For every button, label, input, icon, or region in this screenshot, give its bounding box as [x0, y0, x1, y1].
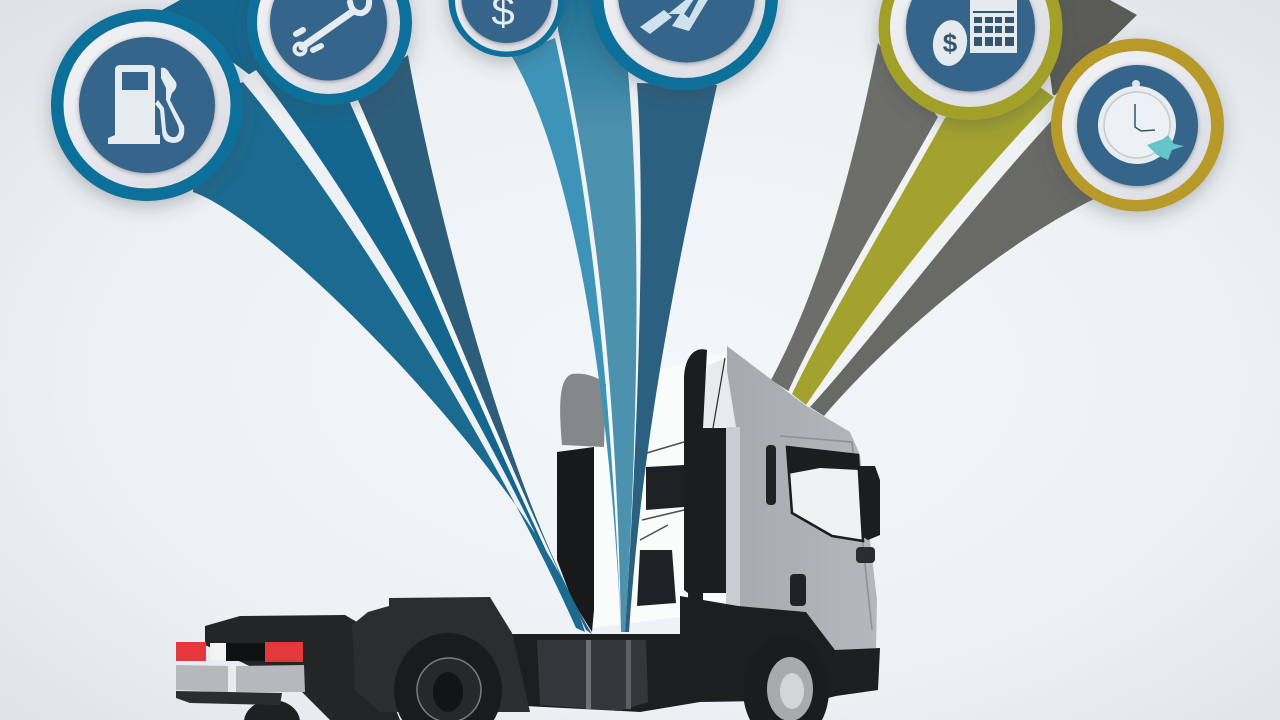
ribbon: mid blue — [558, 0, 637, 632]
fuel tank — [537, 640, 648, 711]
icon: coin: $ — [943, 28, 958, 58]
white stripe left — [240, 70, 580, 630]
icon circle: nozzle tag — [590, 0, 778, 90]
small far rear wheel — [244, 700, 300, 720]
ribbon: middle blue — [162, 0, 583, 628]
ribbon: dark slate — [345, 55, 592, 634]
white stripe right — [348, 100, 586, 630]
icon circle: fuel — [51, 9, 243, 201]
ribbon: light blue — [511, 38, 621, 632]
chassis underbody — [505, 596, 880, 712]
icon circle: dollar — [448, 0, 564, 57]
door slit — [766, 445, 776, 505]
cab vertical strip — [726, 427, 740, 607]
ribbon: lower teal — [193, 82, 585, 632]
side mirror fairing — [560, 374, 606, 447]
exhaust stack — [684, 349, 726, 673]
rear wheel — [394, 633, 502, 720]
rear light cluster — [176, 642, 303, 662]
centre ribbons: light blue fan — [511, 0, 717, 632]
rear deck — [205, 615, 400, 720]
wing mirror — [859, 466, 880, 540]
icon circle: wrench — [247, 0, 412, 105]
icon: nozzle tag — [640, 0, 709, 34]
sleeper cab white panel — [592, 352, 735, 628]
left ribbons: blue fan — [162, 0, 592, 634]
icon: stopwatch — [1098, 80, 1184, 164]
door outline — [780, 436, 872, 630]
icon: wrench — [294, 0, 369, 54]
door window — [787, 447, 863, 541]
icon: coin — [930, 18, 970, 68]
icon circle: clock — [1051, 38, 1224, 212]
sleeper details — [637, 465, 684, 606]
rear bumper — [176, 665, 305, 692]
icon: fuel pump — [108, 65, 184, 144]
icon: calculator — [970, 0, 1017, 53]
icon circle: calculator — [878, 0, 1062, 120]
rear fender — [352, 597, 530, 712]
cab body — [727, 346, 877, 650]
lower rear bar — [176, 691, 282, 705]
ribbon: dark blue — [625, 83, 717, 632]
headlight — [856, 547, 875, 563]
deflector edge line — [713, 358, 725, 428]
window top frame — [787, 447, 859, 474]
white deflector panel — [700, 358, 736, 428]
door handle recess — [790, 574, 806, 606]
black side column — [557, 447, 594, 632]
front wheel — [743, 635, 829, 720]
truck — [176, 346, 880, 720]
right ribbons: grey and olive — [771, 0, 1137, 416]
